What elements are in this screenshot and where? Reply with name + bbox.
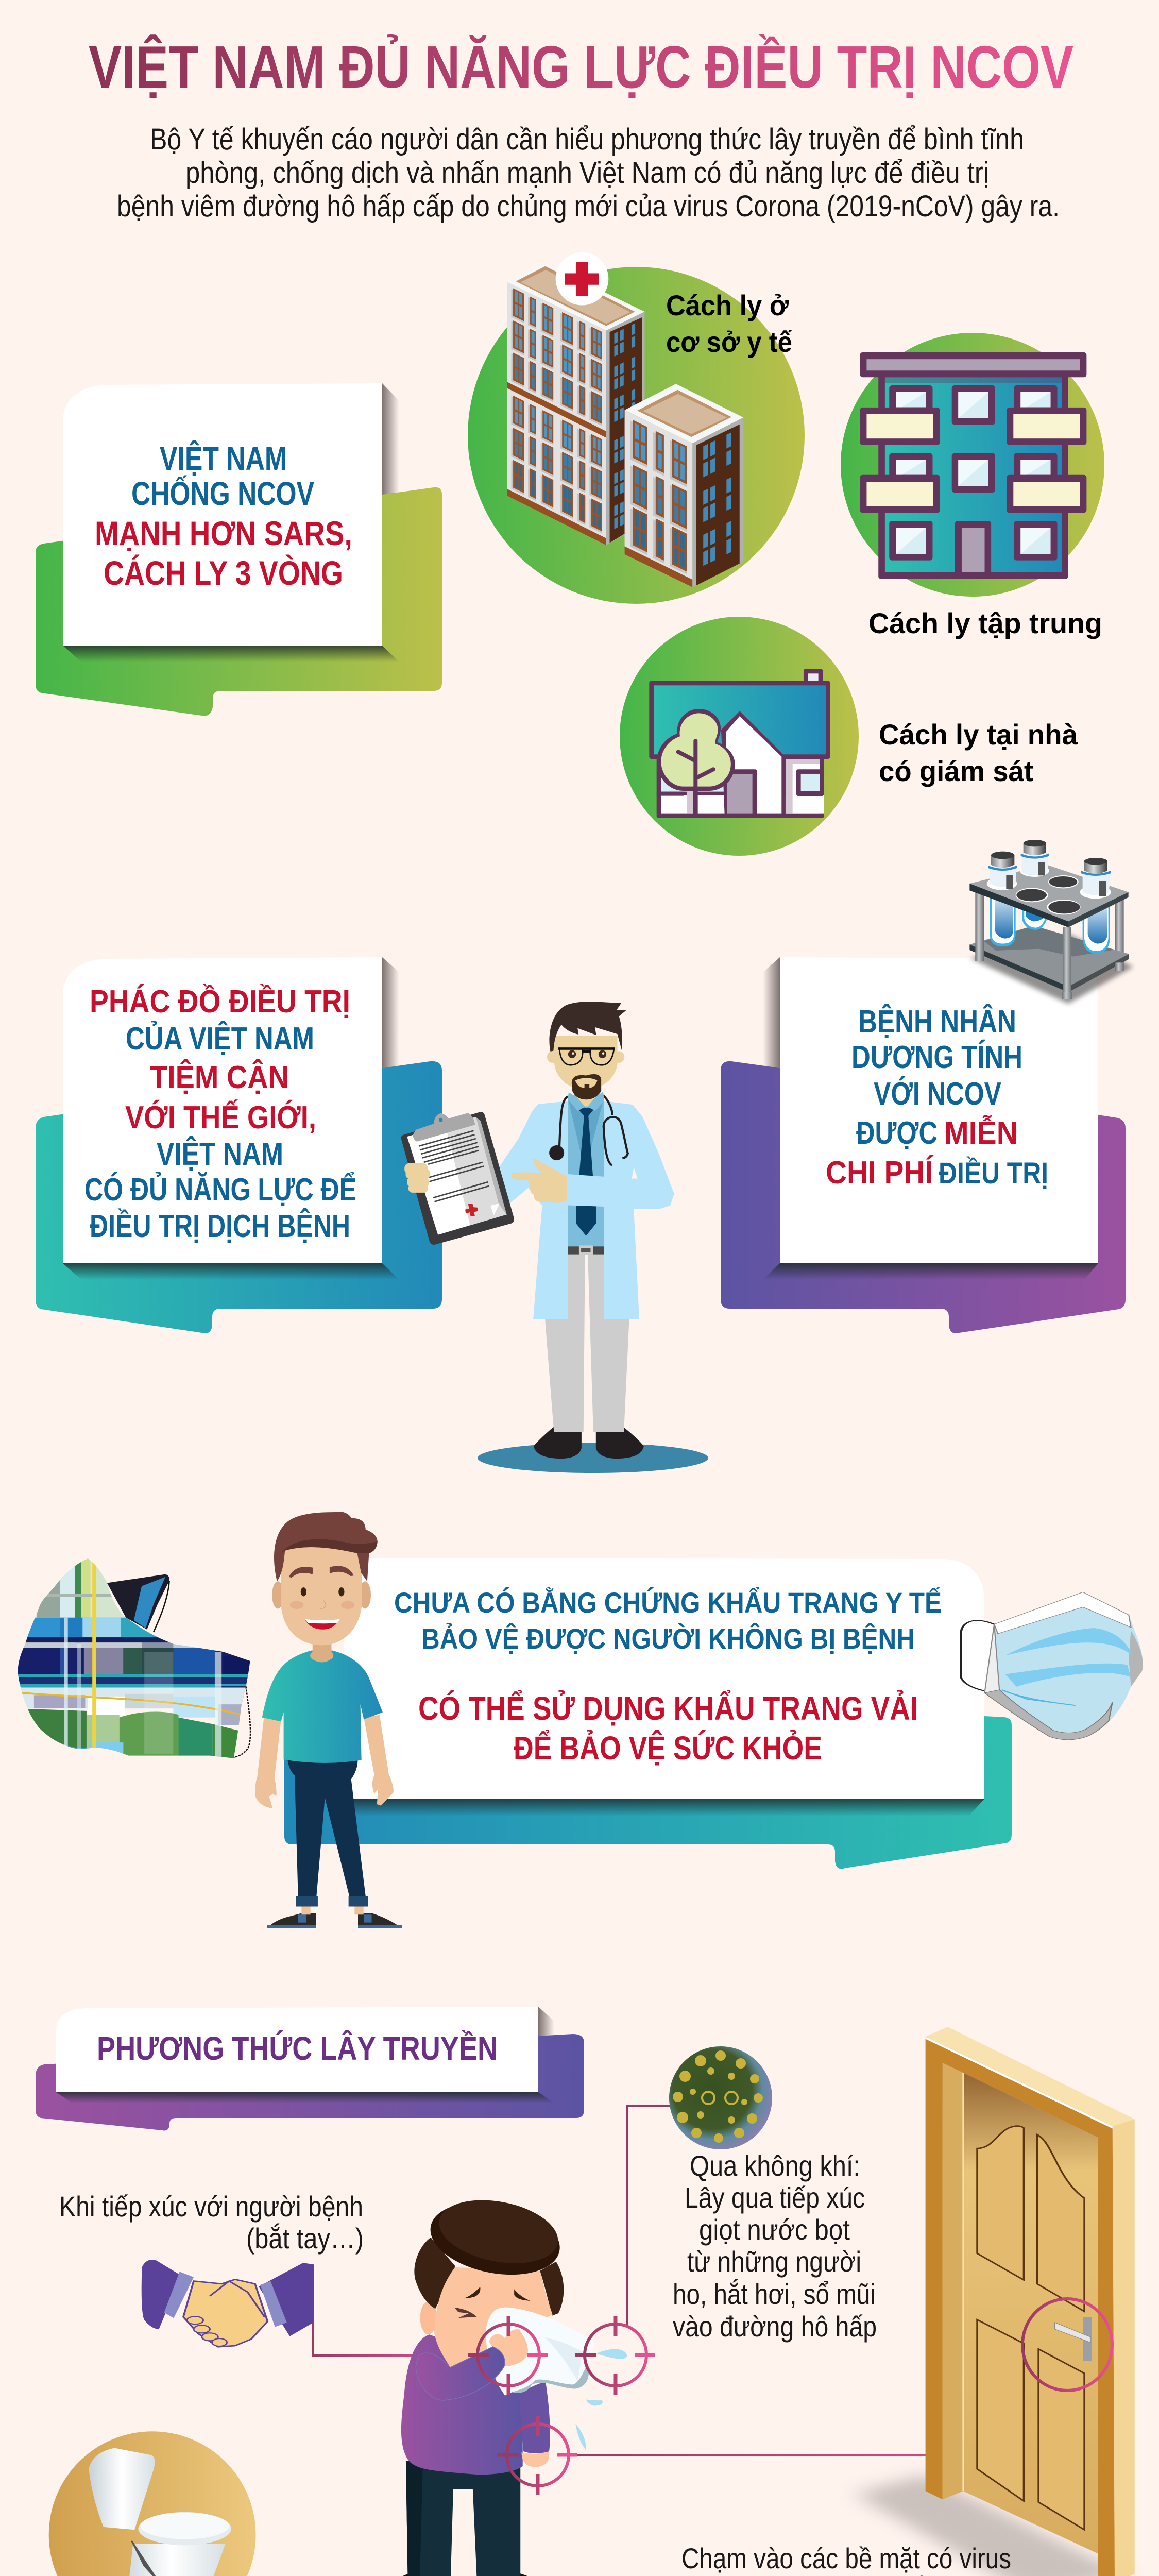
tie <box>577 1108 595 1176</box>
intro text <box>117 123 1060 223</box>
blue band <box>27 1618 158 1637</box>
label: hospital isolation <box>666 289 793 358</box>
card text: VỚI THẾ GIỚI, <box>125 1100 316 1136</box>
card text: ĐỂ BẢO VỆ SỨC KHỎE <box>514 1729 822 1767</box>
card text: ĐIỀU TRỊ <box>939 1157 1048 1190</box>
card shadow <box>763 957 1098 1280</box>
connector lines <box>312 2105 1069 2456</box>
card text: CÁCH LY 3 VÒNG <box>104 554 343 592</box>
label: airborne <box>673 2149 877 2343</box>
forearm <box>567 1174 634 1209</box>
card text: CHỐNG NCOV <box>131 475 314 512</box>
label: airborne: giọt nước bọt <box>699 2213 850 2246</box>
t-shirt <box>262 1651 383 1763</box>
trousers <box>287 1759 366 1896</box>
fist <box>489 2329 528 2366</box>
raised arm <box>416 2347 505 2400</box>
ground shadow <box>478 1443 708 1473</box>
ribbon: teal <box>36 1061 442 1333</box>
white card <box>63 383 382 646</box>
icon: cloth mask <box>10 1554 260 1762</box>
ribbon: green <box>36 487 442 716</box>
back of mask <box>107 1574 169 1630</box>
panel: isolation callout <box>36 383 442 716</box>
icon: test tube rack <box>969 840 1133 1004</box>
card shadow <box>63 957 399 1280</box>
card shadow <box>56 2007 554 2103</box>
label: home isolation: có giám sát <box>879 755 1033 787</box>
white card <box>344 1558 984 1799</box>
icon: apartment in green circle <box>841 333 1104 597</box>
trousers <box>406 2461 520 2576</box>
label: contact: (bắt tay…) <box>246 2222 364 2255</box>
ribbon: teal <box>284 1710 1012 1869</box>
head <box>547 1002 626 1111</box>
shoes <box>267 1913 402 1928</box>
panel: transmission heading <box>36 2007 584 2130</box>
label: airborne: Lây qua tiếp xúc <box>685 2181 865 2214</box>
shoes <box>396 2571 536 2576</box>
white card <box>780 957 1098 1263</box>
card shadow <box>63 383 399 662</box>
label: airborne: Qua không khí: <box>690 2149 860 2182</box>
card shadow <box>344 1799 984 1816</box>
lab coat <box>500 1101 674 1319</box>
ribbon: purple <box>721 1061 1126 1333</box>
door panels <box>977 2126 1084 2530</box>
navy band <box>26 1637 170 1642</box>
white card <box>56 2007 538 2092</box>
card text: CHI PHÍ <box>826 1155 934 1191</box>
card text: VỚI NCOV <box>874 1076 1001 1112</box>
tubes <box>990 866 1110 954</box>
heading text: PHƯƠNG THỨC LÂY TRUYỀN <box>97 2029 498 2067</box>
label: hospital isolation: cơ sở y tế <box>666 326 793 358</box>
card text: CÓ ĐỦ NĂNG LỰC ĐỂ <box>84 1172 356 1208</box>
frame side <box>926 2027 1135 2126</box>
label: surfaces: Chạm vào các bề mặt có virus <box>681 2542 1011 2574</box>
label: airborne: vào đường hô hấp <box>673 2310 877 2343</box>
card text: TIỆM CẬN <box>150 1060 289 1095</box>
card text: VIỆT NAM <box>160 439 287 477</box>
intro text: phòng, chống dịch và nhấn mạnh Việt Nam có đủ năng lực để điều trị <box>185 156 989 190</box>
shoes <box>534 1427 644 1459</box>
white card <box>63 957 382 1263</box>
clipboard <box>401 1112 514 1245</box>
belt <box>568 1245 604 1255</box>
icon: surgical mask <box>961 1592 1143 1740</box>
right arm & body <box>401 2334 523 2475</box>
hospital building <box>507 252 743 587</box>
icon: hospital in green circle <box>468 252 805 604</box>
card text: BỆNH NHÂN <box>858 1004 1016 1040</box>
pointing hand <box>511 1158 567 1203</box>
droplets <box>575 2349 627 2450</box>
card text: BẢO VỆ ĐƯỢC NGƯỜI KHÔNG BỊ BỆNH <box>421 1622 915 1655</box>
vertical stripes <box>64 1618 68 1752</box>
door handle <box>1055 2317 1092 2361</box>
card text <box>394 1586 942 1767</box>
card text: DƯƠNG TÍNH <box>851 1040 1022 1075</box>
card text: MIỄN <box>944 1115 1018 1151</box>
teal stripes <box>10 1674 260 1677</box>
head <box>272 1512 378 1645</box>
label: home isolation: Cách ly tại nhà <box>879 718 1078 751</box>
icon: red cross <box>556 252 608 305</box>
label: concentrated isolation: Cách ly tập trung <box>868 607 1102 639</box>
light band <box>10 1688 260 1708</box>
arms <box>255 1715 394 1808</box>
shirt <box>568 1095 604 1249</box>
card text: ĐƯỢC <box>856 1115 938 1151</box>
card text: VIỆT NAM <box>157 1137 283 1172</box>
card text <box>84 984 356 1244</box>
tree <box>657 709 735 791</box>
label: home isolation <box>879 718 1078 787</box>
door leaf <box>943 2063 1098 2553</box>
upper plaid <box>35 1561 126 1618</box>
card text: PHÁC ĐỒ ĐIỀU TRỊ <box>90 984 350 1020</box>
illustration: doctor <box>401 1002 708 1473</box>
panel: treatment protocol <box>36 957 442 1333</box>
small building <box>625 384 743 443</box>
face <box>414 2191 566 2367</box>
door floor shadow <box>854 2475 1131 2576</box>
panel: masks message <box>284 1558 1012 1869</box>
label: airborne: từ những người <box>687 2245 861 2278</box>
label: contact: Khi tiếp xúc với người bệnh <box>59 2190 363 2223</box>
label: hospital isolation: Cách ly ở <box>666 289 789 321</box>
icon: virus <box>669 2046 772 2149</box>
stethoscope <box>559 1095 628 1165</box>
neck <box>310 1641 333 1663</box>
illustration: door <box>854 2027 1135 2576</box>
icon: handshake <box>142 2260 314 2347</box>
icon: toilet <box>49 2431 256 2576</box>
card text: CỦA VIỆT NAM <box>126 1021 314 1057</box>
label: contact <box>59 2190 364 2255</box>
label: airborne: ho, hắt hơi, sổ mũi <box>673 2278 876 2310</box>
card text: CHƯA CÓ BẰNG CHỨNG KHẨU TRANG Y TẾ <box>394 1586 942 1619</box>
panel: free treatment <box>721 957 1126 1333</box>
intro text: Bộ Y tế khuyến cáo người dân cần hiểu phương thức lây truyền để bình tĩnh <box>150 123 1024 156</box>
frame front <box>926 2037 1115 2576</box>
tissue <box>499 2348 589 2393</box>
card text: MẠNH HƠN SARS, <box>95 514 352 552</box>
card text: CÓ THỂ SỬ DỤNG KHẨU TRANG VẢI <box>418 1689 918 1727</box>
card text: ĐIỀU TRỊ DỊCH BỆNH <box>90 1209 350 1244</box>
icon: house in green circle <box>620 617 859 856</box>
ribbon: purple <box>36 2034 584 2130</box>
green band <box>28 1708 87 1749</box>
illustration: young man <box>255 1512 402 1928</box>
card text <box>826 1004 1048 1191</box>
markers: target circles <box>468 2299 1112 2495</box>
trousers <box>545 1255 629 1432</box>
card text <box>95 439 352 592</box>
holding hand <box>404 1163 430 1193</box>
illustration: coughing person <box>396 2191 627 2576</box>
